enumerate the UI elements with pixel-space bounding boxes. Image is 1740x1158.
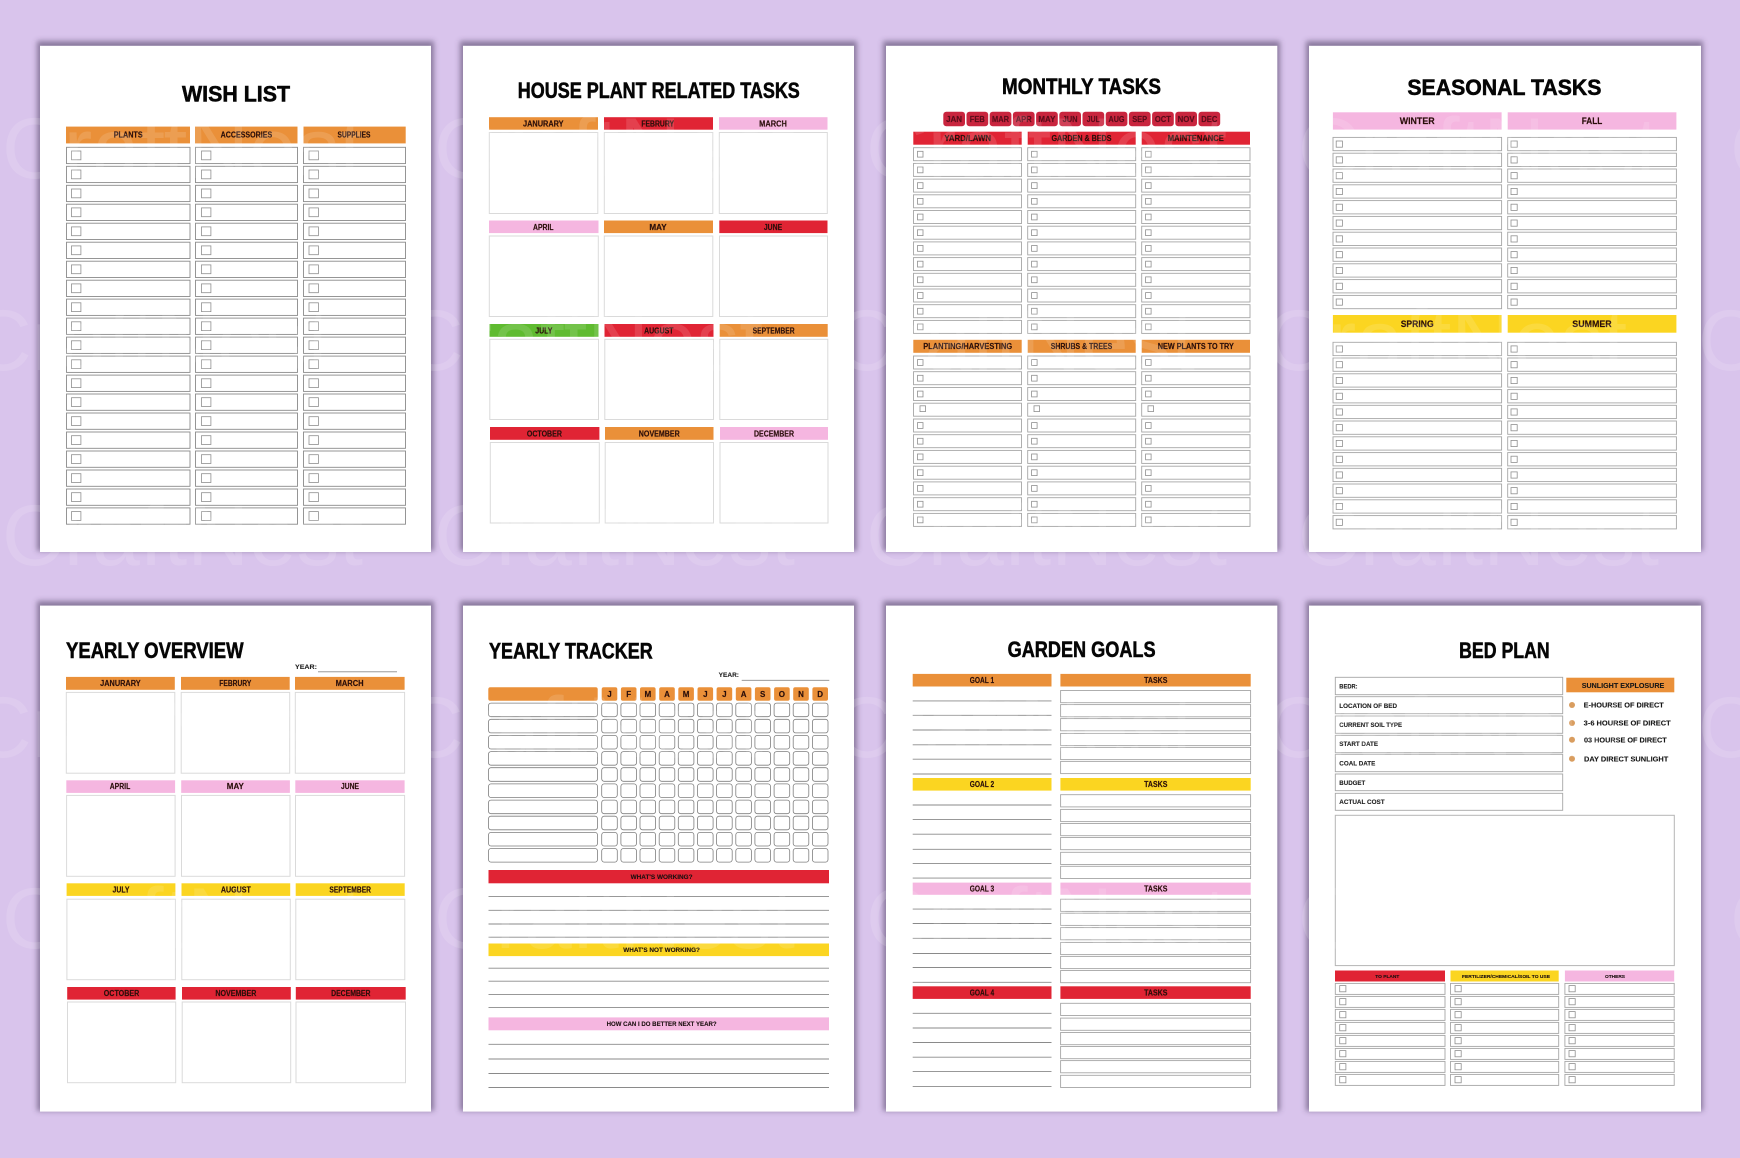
month tabs: MAR [992,115,1009,124]
month tabs: FEB [970,115,985,124]
section: how can I do better next year [488,1017,829,1088]
goal 3 [913,883,1251,983]
sunlight exposure legend: SUNLIGHT EXPLOSURE [1582,681,1664,690]
month tabs: AUG [1108,115,1124,124]
month header bars: JUNE [341,782,360,791]
title: WISH LIST [182,82,291,106]
goal 1: GOAL 1 [970,676,995,685]
month header bars: NOVEMBER [215,989,257,998]
month header bars: NOVEMBER [639,429,680,438]
month header bars: FEBRURY [219,679,252,688]
title: HOUSE PLANT RELATED TASKS [518,78,800,103]
bed details form: COAL DATE [1339,760,1376,768]
month header bars: SEPTEMBER [753,326,795,335]
section: what's not working [488,944,829,1007]
bed details form: START DATE [1339,741,1379,748]
tracker header: M [644,690,651,699]
month tabs: JUN [1063,115,1078,124]
month header bars: DECEMBER [331,989,371,998]
watermark: CraftNest [866,101,1227,197]
title: BED PLAN [1459,638,1550,663]
page: bed plan [1309,606,1701,1112]
year field: YEAR: [295,664,317,671]
sheet [463,46,854,552]
month tabs: NOV [1178,115,1195,124]
goal 2 [913,778,1251,878]
goal 4 [913,986,1251,1088]
sunlight exposure legend: 3-6 HOURSE OF DIRECT [1584,719,1671,728]
sheet [886,606,1277,1112]
month header bars: MARCH [336,679,364,688]
month header bars: MAY [227,782,244,791]
list headers [1335,970,1674,982]
month header bars: JANURARY [523,119,564,128]
large plan box [1335,815,1674,966]
sheet [40,606,431,1112]
goal 3: TASKS [1144,884,1168,893]
lower category headers: SHRUBS & TREES [1051,342,1113,351]
column headers: ACCESSORIES [221,131,273,140]
month header bars [489,117,828,440]
section: what's not working: WHAT'S NOT WORKING? [623,947,700,954]
tracker header: J [703,690,708,699]
tracker header: A [741,690,747,699]
sheet [40,46,431,552]
sheet [1309,606,1701,1112]
goal 3: GOAL 3 [970,884,995,893]
watermark: CraftNest [2,871,363,967]
month tabs: OCT [1155,115,1171,124]
sheet [1309,46,1701,552]
tracker header: S [760,690,766,699]
title: GARDEN GOALS [1008,637,1156,662]
watermark: CraftNest [1266,293,1627,389]
upper category headers: GARDEN & BEDS [1052,134,1112,143]
goal 4: TASKS [1144,988,1168,997]
page: yearly tracker [463,606,854,1112]
sheet [886,46,1277,552]
page: house plant related tasks [463,46,854,552]
month header bars: DECEMBER [754,429,794,438]
column headers: SUPPLIES [338,131,371,140]
page: garden goals [886,606,1277,1112]
month header bars: JUNE [764,223,783,232]
page: seasonal tasks [1309,46,1701,552]
bed details form: BUDGET [1339,780,1365,787]
page: wish list [40,46,431,552]
lower checklist rows [914,356,1250,526]
watermark: CraftNest [866,871,1227,967]
sunlight exposure legend: E-HOURSE OF DIRECT [1584,701,1664,710]
goal 1: TASKS [1144,676,1168,685]
sunlight exposure legend: 03 HOURSE OF DIRECT [1584,735,1667,744]
column headers: PLANTS [114,131,143,140]
watermark: CraftNest [402,293,763,389]
month tabs [943,112,1220,126]
list headers: FERTILIZER/CHEMICAL/SOIL TO USE [1462,974,1550,979]
watermark: CraftNest [1298,871,1659,967]
title: SEASONAL TASKS [1407,75,1601,100]
winter and fall rows [1333,137,1676,309]
goal 2: TASKS [1144,780,1168,789]
list headers: OTHERS [1605,974,1625,979]
watermark: CraftNest [1298,488,1659,584]
watermark: CraftNest [434,871,795,967]
watermark: CraftNest [834,680,1195,776]
page: monthly tasks [886,46,1277,552]
watermark: CraftNest [402,680,763,776]
upper checklist rows [914,148,1250,333]
winter and fall headers: FALL [1582,116,1603,126]
section: what's working: WHAT'S WORKING? [631,874,693,881]
watermark: CraftNest [2,488,363,584]
watermark: CraftNest [1298,101,1659,197]
month tabs: JAN [946,115,962,124]
sunlight exposure legend: DAY DIRECT SUNLIGHT [1584,754,1669,763]
month tabs: APR [1016,115,1032,124]
month header bars: AUGUST [644,326,674,335]
tracker header [488,687,828,701]
year field [719,672,829,680]
month header bars: APRIL [533,223,554,232]
spring and summer headers: SPRING [1401,319,1434,329]
column headers [66,127,406,143]
tracker header: O [779,690,785,699]
watermark: CraftNest [1266,680,1627,776]
title: YEARLY TRACKER [489,638,653,663]
list rows [1335,983,1674,1085]
upper category headers: YARD/LAWN [944,134,991,143]
bed details form: ACTUAL COST [1339,799,1385,806]
month header bars: OCTOBER [104,989,139,998]
month header bars: OCTOBER [527,429,562,438]
month header bars: APRIL [110,782,130,791]
tracker header: F [626,690,631,699]
title: MONTHLY TASKS [1002,74,1161,99]
section: what's working [488,870,829,937]
watermark [0,101,1740,967]
month header bars: JANURARY [100,679,141,688]
month header bars [66,677,406,1000]
watermark: CraftNest [434,488,795,584]
month header bars: JULY [112,886,130,895]
goal 4: GOAL 4 [970,988,995,997]
tracker header: D [817,690,823,699]
winter and fall headers [1333,112,1676,130]
spring and summer rows [1333,342,1676,529]
tracker header: M [683,690,690,699]
tracker header: J [722,690,727,699]
upper category headers [913,132,1250,145]
bed details form: BEDR: [1339,683,1358,690]
tracker grid [488,703,828,862]
watermark: CraftNest [2,101,363,197]
bed details form: CURRENT SOIL TYPE [1339,722,1403,729]
sheet [463,606,854,1112]
month header bars: MAY [649,223,667,232]
month tabs: JUL [1087,115,1100,124]
month boxes [489,132,828,523]
bed details form [1335,677,1563,810]
month tabs: SEP [1132,115,1148,124]
year field [295,664,397,672]
upper category headers: MAINTENANCE [1168,134,1224,143]
tracker header: A [664,690,670,699]
month header bars: JULY [535,326,553,335]
lower category headers: NEW PLANTS TO TRY [1158,342,1234,351]
month tabs: MAY [1038,115,1056,124]
goal 2: GOAL 2 [970,780,995,789]
month tabs: DEC [1201,115,1218,124]
watermark: CraftNest [434,101,795,197]
year field: YEAR: [719,672,739,679]
checklist rows [66,147,406,524]
spring and summer headers [1333,315,1676,333]
month header bars: MARCH [759,119,787,128]
tracker header: N [798,690,804,699]
watermark: CraftNest [866,488,1227,584]
section: how can I do better next year: HOW CAN I DO BETTER NEXT YEAR? [607,1021,717,1028]
month header bars: SEPTEMBER [329,886,371,895]
goal 1 [913,674,1251,774]
tracker header: J [607,690,612,699]
title: YEARLY OVERVIEW [66,638,244,663]
month header bars: FEBRURY [641,119,675,128]
watermark: CraftNest [834,293,1195,389]
winter and fall headers: WINTER [1400,116,1435,126]
list headers: TO PLANT [1375,974,1399,979]
month header bars: AUGUST [221,886,251,895]
page: yearly overview [40,606,431,1112]
bed details form: LOCATION OF BED [1339,703,1397,710]
spring and summer headers: SUMMER [1572,319,1612,329]
lower category headers: PLANTING/HARVESTING [923,342,1012,351]
month boxes [66,692,406,1083]
lower category headers [913,340,1250,353]
sunlight exposure legend [1566,678,1674,763]
